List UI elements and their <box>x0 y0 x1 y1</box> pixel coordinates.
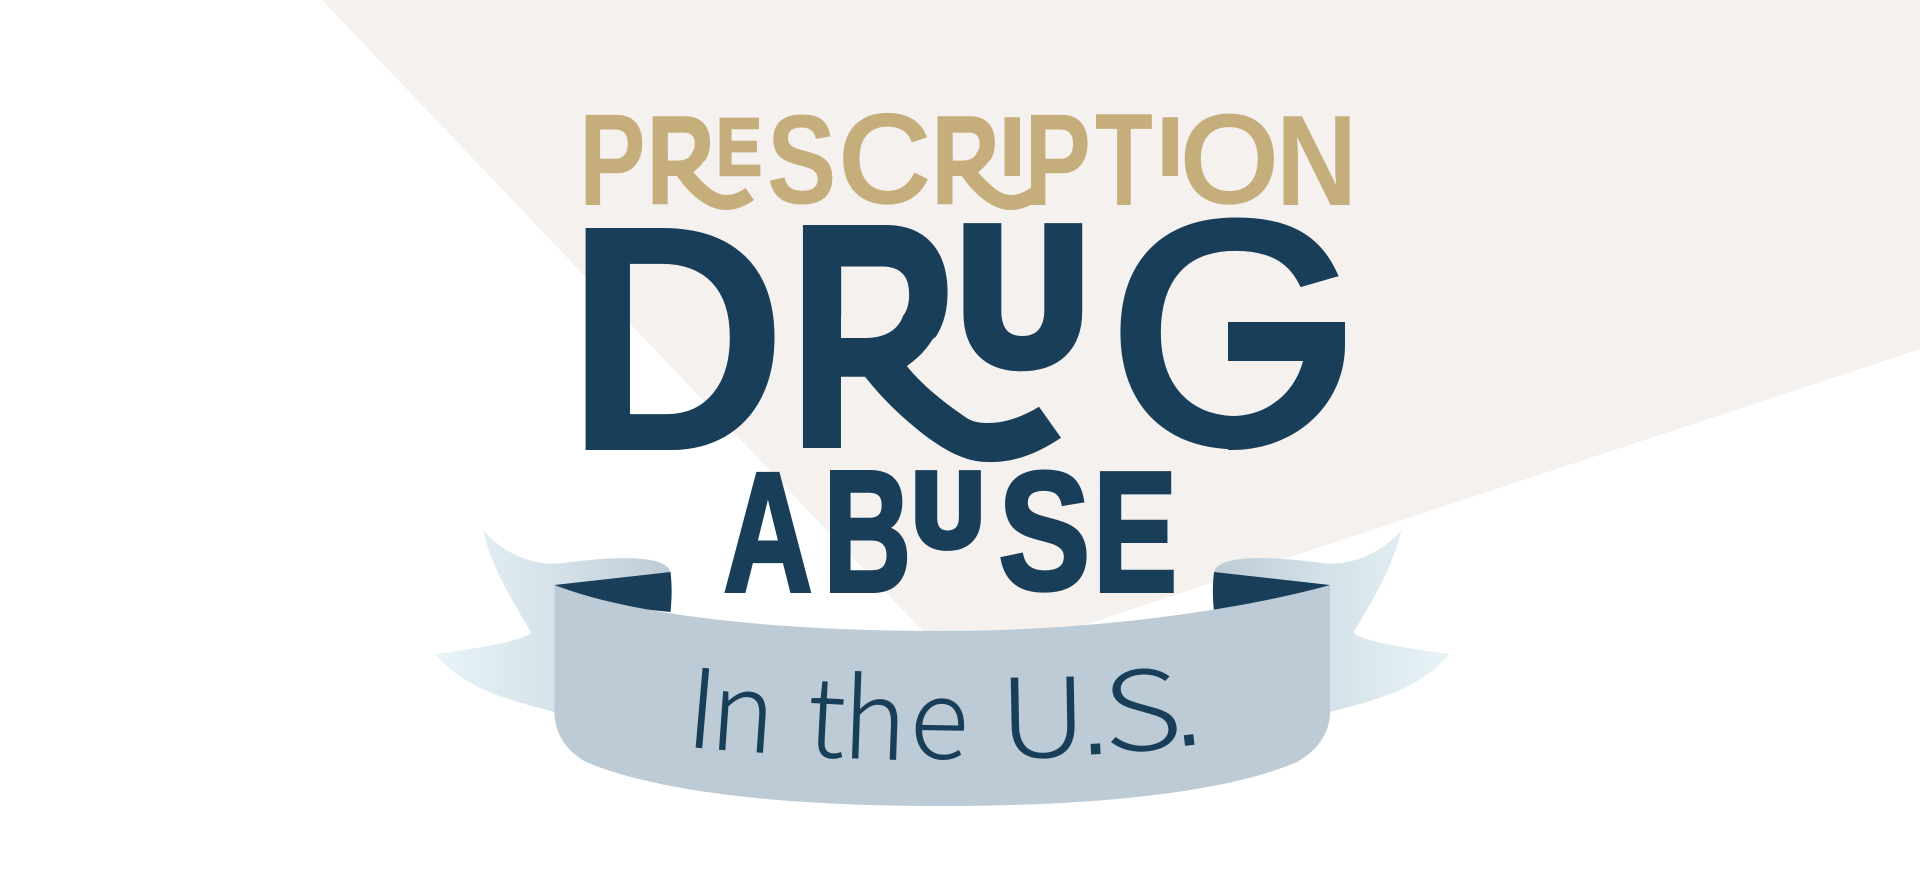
title line: PRESCRIPTION: P <box>579 87 646 233</box>
title line: ABUSE <box>724 435 1177 628</box>
ribbon right tail <box>1214 530 1450 712</box>
title line: PRESCRIPTION: N <box>1276 88 1357 233</box>
ribbon <box>435 530 1450 806</box>
title line: PRESCRIPTION: O <box>1181 91 1278 228</box>
ribbon text: In the U.S.: h <box>840 630 910 792</box>
title line: ABUSE: S <box>998 437 1090 625</box>
ribbon left fold <box>554 572 672 612</box>
ribbon text: In the U.S.: t <box>803 628 850 790</box>
title line: PRESCRIPTION <box>586 112 1350 210</box>
title line: PRESCRIPTION: I <box>1155 99 1185 194</box>
title line: ABUSE: E <box>1093 436 1177 627</box>
title line: DRUG: D <box>565 157 787 519</box>
title line: PRESCRIPTION: E <box>716 101 762 193</box>
title line: PRESCRIPTION: P <box>1024 87 1091 233</box>
ribbon text: In the U.S.: e <box>908 630 970 791</box>
ribbon left tail <box>435 530 670 712</box>
title line: DRUG: U <box>959 189 1087 404</box>
title line: DRUG <box>586 218 1345 462</box>
title line: PRESCRIPTION: C <box>839 91 930 228</box>
ribbon right fold <box>1213 572 1330 612</box>
title line: PRESCRIPTION: S <box>767 89 836 231</box>
title line: DRUG: G <box>1109 157 1361 508</box>
title line: PRESCRIPTION: R <box>647 92 714 230</box>
title line: ABUSE: U <box>914 453 983 568</box>
title line: ABUSE: B <box>823 435 911 628</box>
ribbon text: In the U.S.: . <box>1077 664 1111 777</box>
title line: PRESCRIPTION: I <box>997 99 1027 194</box>
ribbon text: In the U.S.: S <box>1096 621 1186 785</box>
ribbon text: In the U.S.: I <box>681 619 725 781</box>
ribbon main band <box>554 585 1330 806</box>
title line: PRESCRIPTION: T <box>1095 87 1153 234</box>
title line: PRESCRIPTION: R <box>932 92 999 230</box>
ribbon text: In the U.S.: . <box>1165 654 1206 769</box>
ribbon text: In the U.S. <box>681 619 1206 792</box>
ribbon text: In the U.S.: n <box>706 621 782 785</box>
title line: ABUSE: A <box>724 439 812 628</box>
background shape <box>322 0 1920 667</box>
title line: DRUG: R <box>790 159 958 512</box>
ribbon text: In the U.S.: U <box>997 630 1089 790</box>
